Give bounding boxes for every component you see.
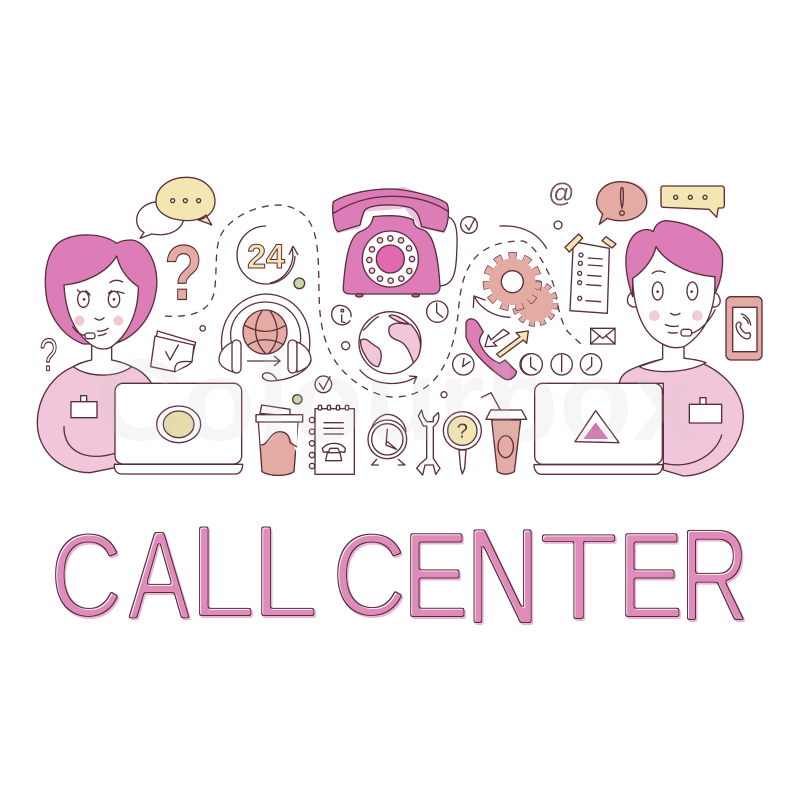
man cheeks [649,310,703,321]
laptop right [534,383,663,474]
woman arm line [64,427,115,456]
gear rotation arrows [473,226,547,317]
woman hair [45,235,157,344]
letter C: C [50,510,122,642]
man eyes [652,271,698,300]
globe arrow [360,370,417,383]
smartphone [726,297,762,360]
man arm line [663,435,722,465]
24 hours icon: 24 [247,238,285,276]
centre-left panel: 24 hours and headset [219,226,311,381]
small circles and green dots [293,278,447,404]
dashed connecting path [165,205,582,397]
man badge [689,398,722,423]
magnifying glass [443,412,481,474]
envelope [591,328,615,344]
woman face [64,256,138,349]
man body [619,358,743,476]
white speech bubble [137,202,183,238]
cream speech bubble [156,177,215,225]
alert speech bubble [597,181,648,224]
right panel: man operator and icons [521,177,762,476]
woman neck [73,340,132,375]
pink handset [466,319,517,380]
letter C: C [332,511,406,640]
woman eyes [77,280,124,307]
title letters with wide stems [188,497,619,647]
small circle [200,326,205,331]
title letters with narrow stems [50,499,749,652]
clock [520,354,541,375]
laptop left [114,383,243,474]
title: CALL CENTER [50,497,749,652]
letter A: A [128,506,190,645]
man hair [626,221,723,297]
man mouth and headset microphone [665,310,715,336]
cream rectangular speech bubble [661,186,724,217]
left panel: woman operator and icons [37,177,243,474]
gears [486,256,555,323]
man neck [639,340,706,372]
letter E: E [402,507,469,643]
notebook [309,405,354,474]
id badge [71,396,97,418]
info icon [332,305,351,325]
clock [427,301,448,322]
letter T: T [538,507,619,647]
letter L: L [188,498,256,646]
check circle low [315,376,332,393]
woman body [37,360,153,473]
clock [453,354,474,375]
24 hours icon [237,226,298,284]
sticky note with check [151,331,196,372]
small circle [554,221,562,229]
letter L: L [250,497,320,646]
large question mark: ? [164,230,202,317]
man ears [628,292,720,307]
white arrow [485,329,509,347]
at sign: @ [548,177,575,207]
letter N: N [465,499,540,652]
watermark: Colourbox [95,335,700,465]
checklist note [565,234,616,313]
magnifying glass: ? [457,420,468,442]
woman cheeks [74,316,123,326]
centre panel: icons [256,187,555,475]
woman mouth and headset microphone [73,318,108,339]
three clocks [521,354,602,375]
globe [359,312,421,374]
telephone [331,187,457,297]
coffee cup right [482,393,527,474]
cream arrow [497,331,528,357]
man face [633,247,715,348]
coffee cup left [256,405,303,475]
letter E: E [617,507,684,643]
alarm clock [368,414,407,465]
headset with globe [219,294,311,381]
letter R: R [679,503,749,648]
wrench [417,410,440,475]
small question mark: ? [40,331,57,381]
check circle top [461,217,477,233]
